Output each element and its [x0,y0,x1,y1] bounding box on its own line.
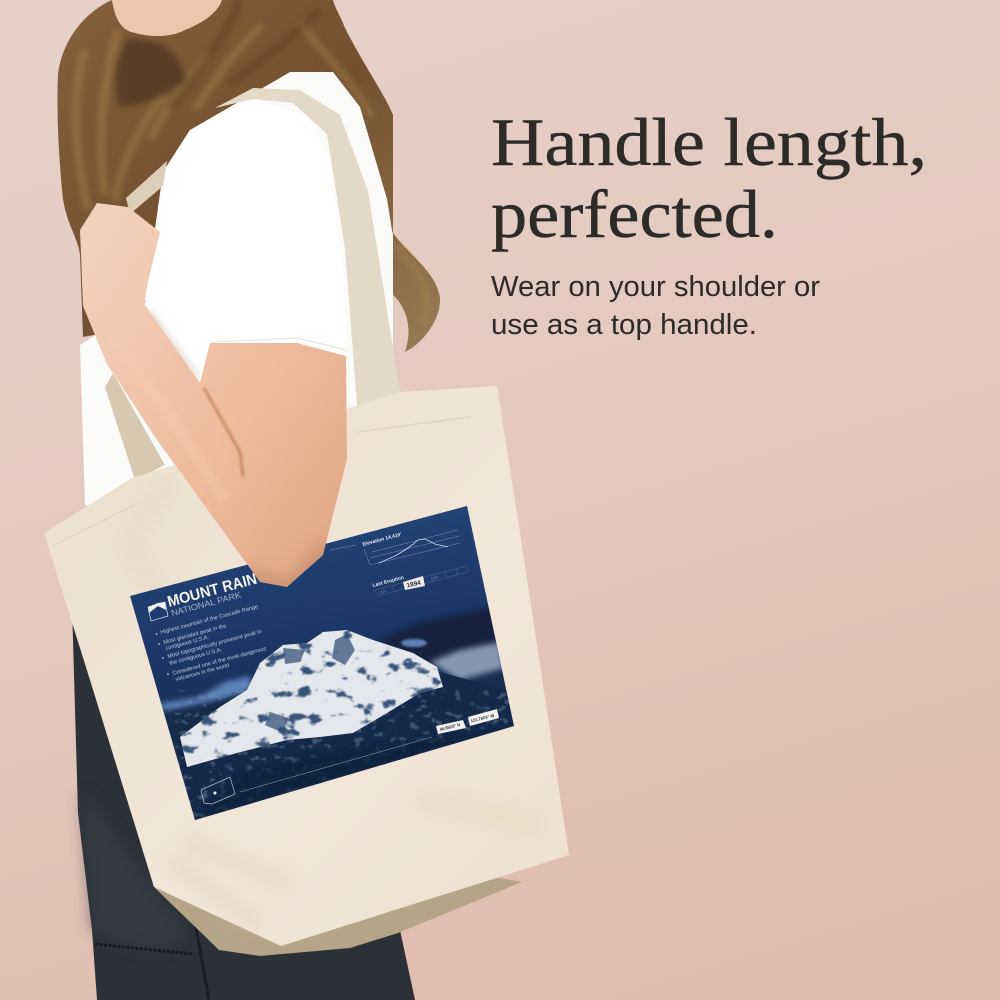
heading [491,104,927,252]
subheading text: use as a top handle. [491,309,757,341]
fact bullets: Highest mountain of the Cascade Range [160,604,259,636]
mountain snow [180,630,443,767]
subheading text: Wear on your shoulder or [491,271,820,303]
fact bullets: Most glaciated peak in the [163,623,227,646]
last eruption year selector: Last Eruption [372,575,405,589]
lower back strap [105,373,165,480]
mountain logo icon [148,602,168,621]
poster title [148,571,259,621]
heading: Handle length, [491,104,927,180]
latitude and longitude tags: 46.8523° N [439,722,461,732]
latitude and longitude tags: 121.7603° W [470,713,495,723]
arm and hand [80,203,347,590]
subheading: national park: NATIONAL PARK [170,590,242,618]
fact bullets: the contiguous U.S.A. [169,647,223,667]
mountain rock shadows [265,634,355,733]
fact bullets: volcanoes in the world [175,663,230,683]
heading: perfected. [491,176,778,252]
fact bullets: Considered one of the most dangerous [172,646,267,677]
subheading text [491,271,820,341]
washington state map [201,777,235,804]
tote bag body [44,386,569,946]
poster landscape [150,605,515,820]
fact bullets [156,604,267,683]
poster: Mount Rainier National Park [130,506,515,820]
latitude and longitude tags [436,709,499,734]
heading: mount rainier: MOUNT RAIN [166,571,259,611]
hair [57,0,440,352]
elevation chart [330,530,460,565]
fact bullets: contiguous U.S.A. [165,634,210,652]
front shoulder strap [215,88,400,405]
lower forest flecks [175,690,515,820]
back strap over hand [126,161,167,214]
last eruption year selector: 1820 [378,589,387,595]
poster background [130,506,514,820]
last eruption year selector: 1894 [406,580,422,589]
elevation chart: Elevation 14,410' [362,532,402,548]
jeans [72,605,415,1000]
last eruption year selector [372,566,468,596]
white t-shirt [80,72,393,510]
face and neck [112,0,222,36]
tote bag bottom flap [155,860,522,956]
fact bullets: Most topographically prominent peak in [167,629,263,660]
last eruption year selector: 1906 [430,575,439,581]
